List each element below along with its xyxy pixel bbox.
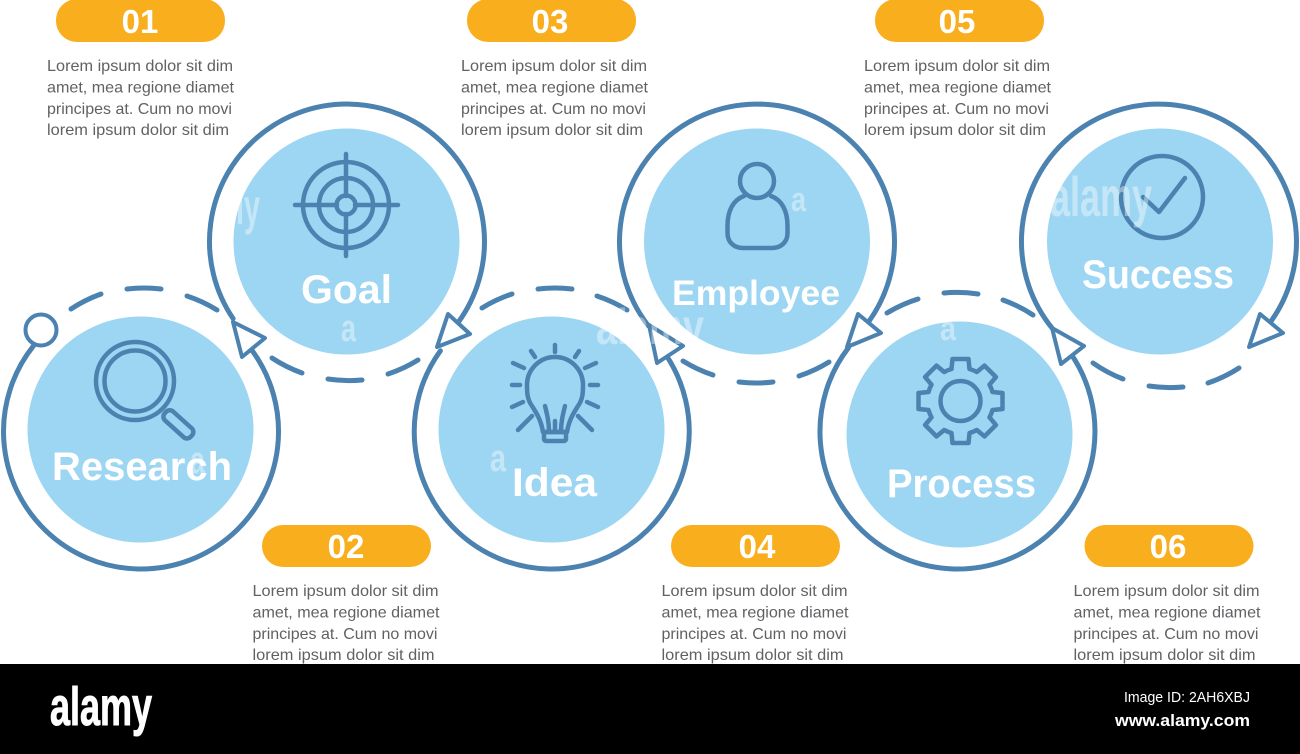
- footer bar: [0, 664, 1300, 754]
- badge 05: 05: [939, 3, 975, 40]
- text block 01: Lorem ipsum dolor sit dim: [47, 58, 233, 75]
- text block 05: amet, mea regione diamet: [864, 80, 1052, 96]
- goal ring: [209, 104, 484, 322]
- badge 03: [467, 0, 636, 42]
- text block 01: amet, mea regione diamet: [47, 80, 235, 96]
- text block 03: Lorem ipsum dolor sit dim: [461, 58, 647, 75]
- watermark marks: alamy: [596, 299, 704, 355]
- idea label: Idea: [512, 461, 598, 505]
- badge 05: [875, 0, 1044, 42]
- goal disc: [234, 128, 460, 354]
- icon: gear: [918, 359, 1002, 443]
- goal label: Goal: [301, 268, 392, 312]
- text block 02: Lorem ipsum dolor sit dim: [252, 583, 438, 600]
- text block 04: lorem ipsum dolor sit dim: [662, 647, 844, 664]
- text block 01: principes at. Cum no movi: [47, 101, 232, 118]
- text block 02: lorem ipsum dolor sit dim: [252, 647, 434, 664]
- panel: step 2 goal: [209, 104, 484, 381]
- text block 03: amet, mea regione diamet: [461, 80, 649, 96]
- watermark marks: [190, 165, 1152, 482]
- footer logo: alamy: [50, 677, 152, 737]
- text block 06: Lorem ipsum dolor sit dim: [1074, 583, 1260, 600]
- success disc: [1047, 128, 1273, 354]
- employee disc: [644, 128, 870, 354]
- employee dashed connector: [683, 361, 829, 383]
- research ring: [4, 346, 279, 569]
- footer url: www.alamy.com: [1114, 711, 1250, 730]
- text block 01: lorem ipsum dolor sit dim: [47, 122, 229, 139]
- text block 06: amet, mea regione diamet: [1074, 604, 1261, 622]
- text block 04: principes at. Cum no movi: [662, 626, 846, 643]
- idea ring: [414, 351, 689, 569]
- employee label: Employee: [672, 274, 840, 313]
- badge 01: [56, 0, 225, 42]
- badge 03: 03: [532, 3, 568, 40]
- icon: person: [728, 164, 788, 248]
- watermark marks: a: [791, 181, 807, 219]
- arrows: [233, 314, 1283, 364]
- watermark marks: a: [940, 310, 957, 348]
- watermark marks: a: [190, 440, 206, 482]
- idea disc: [438, 316, 664, 542]
- text block 05: Lorem ipsum dolor sit dim: [864, 58, 1050, 75]
- panel: step 5 process: [820, 292, 1095, 569]
- watermark marks: a: [341, 308, 357, 350]
- text block 06: principes at. Cum no movi: [1074, 626, 1258, 643]
- text block 03: principes at. Cum no movi: [461, 101, 646, 118]
- text block 02: principes at. Cum no movi: [252, 626, 438, 643]
- process label: Process: [887, 462, 1036, 506]
- icon: target: [295, 154, 398, 256]
- success dashed connector: [1093, 363, 1239, 388]
- panel: step 6 success: [1021, 104, 1296, 388]
- text block 03: lorem ipsum dolor sit dim: [461, 122, 643, 139]
- badge 06: 06: [1150, 528, 1186, 565]
- badge 01: 01: [122, 3, 158, 40]
- text block 04: Lorem ipsum dolor sit dim: [662, 583, 848, 600]
- icon: light bulb: [512, 345, 598, 441]
- badge 02: 02: [328, 528, 364, 565]
- panel: step 3 idea: [414, 288, 689, 569]
- success ring: [1021, 104, 1296, 329]
- process disc: [846, 322, 1072, 548]
- badge 04: [671, 525, 840, 567]
- panel: step 1 research: [4, 288, 279, 569]
- text block 02: amet, mea regione diamet: [252, 604, 440, 622]
- text block 04: amet, mea regione diamet: [662, 604, 849, 622]
- text block 04: [662, 583, 849, 664]
- watermark marks: a: [490, 438, 507, 480]
- badge 02: [262, 525, 431, 567]
- text block 01: [47, 58, 235, 139]
- icon: magnifier: [96, 342, 195, 441]
- watermark marks: ly: [236, 179, 260, 235]
- icon: check circle: [1121, 156, 1203, 238]
- watermark marks: alamy: [1050, 165, 1152, 228]
- text block 05: lorem ipsum dolor sit dim: [864, 122, 1046, 139]
- text block 05: [864, 58, 1052, 139]
- goal dashed connector: [272, 358, 418, 381]
- research label: Research: [52, 445, 232, 489]
- text block 03: [461, 58, 649, 139]
- process dashed connector: [887, 292, 1033, 315]
- text block 06: [1074, 583, 1261, 664]
- research disc: [28, 316, 254, 542]
- idea dashed connector: [482, 288, 627, 310]
- icon: start node: [26, 314, 56, 346]
- success label: Success: [1082, 253, 1234, 297]
- employee ring: [619, 104, 894, 326]
- badge 04: 04: [739, 528, 776, 565]
- text block 06: lorem ipsum dolor sit dim: [1074, 647, 1256, 664]
- panel: step 4 employee: [619, 104, 894, 383]
- process ring: [820, 348, 1095, 569]
- text block 05: principes at. Cum no movi: [864, 101, 1049, 118]
- research dashed connector: [71, 288, 217, 310]
- footer image id: Image ID: 2AH6XBJ: [1124, 689, 1250, 706]
- text block 02: [252, 583, 440, 664]
- badge 06: [1084, 525, 1254, 567]
